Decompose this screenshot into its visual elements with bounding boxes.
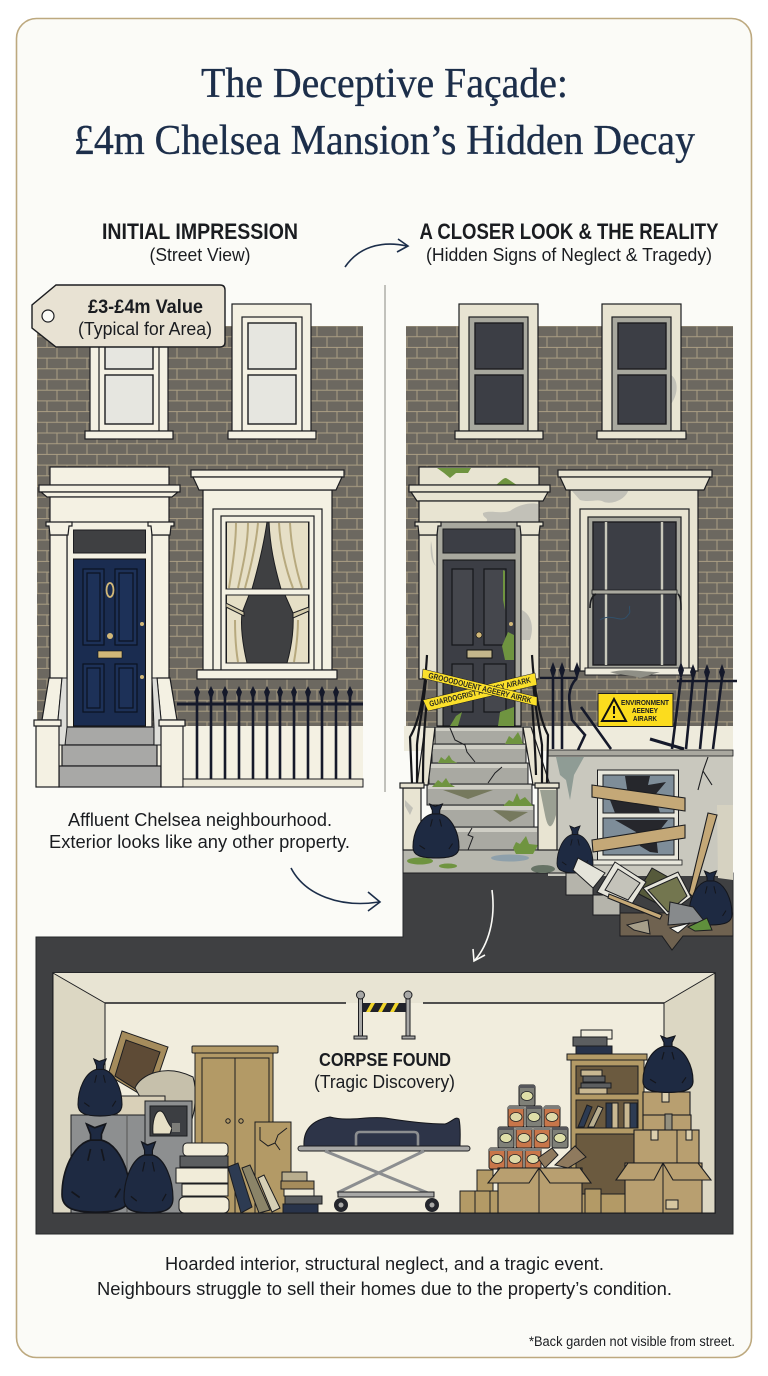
sack (135, 1071, 195, 1125)
dark upper window right (597, 304, 686, 439)
back wall (53, 973, 715, 1213)
panel: interior room (53, 973, 715, 1213)
front steps (59, 727, 161, 787)
base wall right (404, 726, 733, 751)
small box (117, 1096, 165, 1116)
decayed ground window (558, 470, 712, 678)
heading: closer look (420, 219, 719, 265)
yellow police tape: GROOODOUENT AGEERY AIRRK (427, 671, 533, 705)
left wall (53, 973, 105, 1213)
heading: closer look: (Hidden Signs of Neglect & Tragedy) (426, 245, 712, 265)
caption: affluent neighbourhood: Affluent Chelsea neighbourhood. (68, 810, 332, 830)
panel: right house reality (400, 304, 737, 950)
callout: value tag: (Typical for Area) (78, 319, 212, 339)
heading: initial impression: INITIAL IMPRESSION (102, 219, 298, 244)
caption: hoarded interior: Hoarded interior, structural neglect, and a tragic event. (165, 1254, 604, 1274)
decayed door surround (409, 467, 550, 726)
ground window with curtains (191, 470, 344, 679)
ceiling (53, 973, 715, 1003)
label: corpse found: (Tragic Discovery) (314, 1072, 455, 1092)
arrow: top curved arrow (345, 239, 408, 267)
dark upper window left (455, 304, 543, 439)
base wall left (37, 726, 363, 787)
book stack (176, 1143, 229, 1213)
heading: initial impression: (Street View) (150, 245, 250, 265)
cracked panel (255, 1122, 291, 1213)
grey neglected door (443, 560, 515, 726)
label: corpse found: CORPSE FOUND (319, 1049, 451, 1070)
label: corpse found (314, 1049, 455, 1092)
boarded window (592, 770, 685, 865)
grey cabinet (71, 1115, 145, 1213)
caption: hoarded interior (97, 1254, 672, 1299)
warning sign: AIRARK (633, 716, 657, 723)
iron railings (177, 686, 363, 787)
hoard: left pile (71, 1031, 195, 1213)
callout: value tag (32, 285, 225, 347)
broken railings (540, 662, 737, 750)
footnote: *Back garden not visible from street. (529, 1334, 735, 1349)
divider (384, 285, 386, 792)
title: The Deceptive Façade: (201, 61, 568, 107)
black bag right (643, 1036, 693, 1092)
small book stack (281, 1172, 322, 1213)
entrance ground with moss (403, 850, 566, 873)
title (74, 61, 695, 164)
basement wall (548, 750, 733, 876)
door surround and entablature (39, 467, 180, 727)
callout: value tag: £3-£4m Value (88, 297, 203, 318)
arrow: lower curved arrow (291, 868, 380, 911)
panel: dark basement surround (36, 873, 733, 1234)
black bags left (62, 1059, 173, 1213)
bin bag by steps (413, 804, 459, 858)
heading: closer look: A CLOSER LOOK & THE REALITY (420, 219, 719, 244)
bin bag by basement (557, 826, 593, 873)
wardrobe (192, 1046, 278, 1213)
bent stair railings (410, 655, 548, 783)
panel: left house street view (34, 304, 363, 787)
warning sign: AEENEY (632, 708, 658, 715)
old tv (145, 1101, 192, 1213)
step plinths (34, 678, 185, 787)
cracked steps (427, 727, 538, 854)
tilted picture frame (108, 1031, 168, 1100)
right wall (664, 973, 715, 1213)
yellow police tape: GUARDOGRIST AGENCY AIRARK (428, 675, 532, 709)
upper window left (85, 304, 173, 439)
arrow: white arrow into basement (473, 890, 493, 961)
leaning books (228, 1163, 280, 1213)
warning sign: ENVIRONMENT (621, 700, 670, 707)
caption: affluent neighbourhood: Exterior looks like any other property. (49, 832, 350, 852)
navy front door (74, 559, 146, 726)
upper window right (228, 304, 316, 439)
stained plinths (400, 727, 559, 850)
brick wall right (406, 326, 733, 726)
icon: barrier (354, 991, 415, 1039)
brick wall left (37, 326, 363, 726)
caption: hoarded interior: Neighbours struggle to sell their homes due to the property’s condition. (97, 1279, 672, 1299)
warning sign (598, 694, 673, 726)
title: £4m Chelsea Mansion’s Hidden Decay (74, 118, 695, 164)
stack of cardboard boxes (616, 1092, 711, 1213)
rubble and debris pile (566, 805, 733, 950)
caption: affluent neighbourhood (49, 810, 350, 852)
open cardboard box (488, 1168, 591, 1213)
tin can pyramid (460, 1085, 601, 1213)
bookshelf (567, 1030, 647, 1213)
gurney with covered body (298, 1117, 470, 1212)
heading: initial impression (102, 219, 298, 265)
curtains (226, 522, 309, 663)
